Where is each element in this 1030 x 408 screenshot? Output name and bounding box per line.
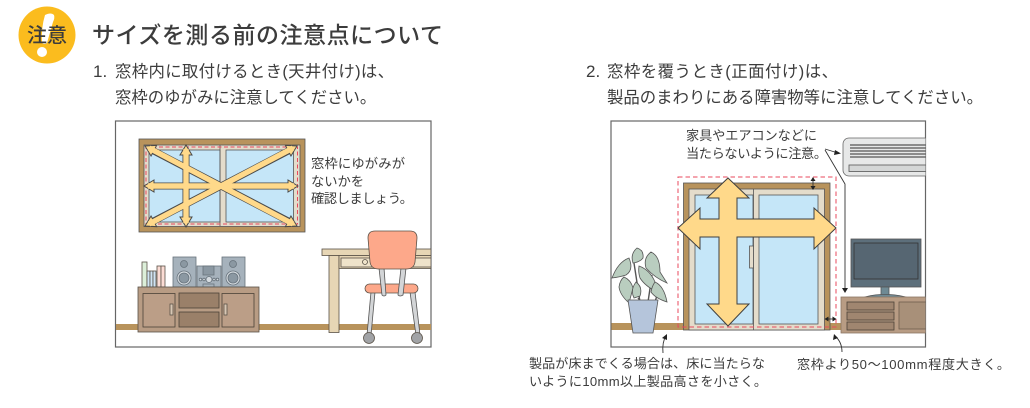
heading: case 1 [93,62,394,107]
room furniture [116,231,431,344]
note: floor clearance [529,356,767,389]
window with distortion arrows [139,139,305,232]
panel: inside mount [116,121,431,347]
icon: caution badge: 注意 [27,24,67,47]
heading: case 1: 1. [93,62,107,81]
title: サイズを測る前の注意点について [92,22,443,48]
text: check the frame: 確認しましょう。 [311,191,413,206]
note: floor clearance: いように10mm以上製品高さを小さく。 [529,373,767,389]
text: check the frame [311,156,413,206]
floor and furniture [611,138,933,333]
text: furniture warning: 家具やエアコンなどに [686,128,817,143]
icon: caution badge [18,6,76,64]
heading: case 1: 窓枠のゆがみに注意してください。 [115,89,376,107]
panel: face mount [611,121,933,353]
heading: case 2: 窓枠を覆うとき(正面付け)は、 [607,63,838,81]
text: furniture warning: 当たらないように注意。 [686,146,827,161]
heading: case 2: 2. [586,62,600,81]
heading: case 1: 窓枠内に取付けるとき(天井付け)は、 [115,63,394,81]
sliding window [678,177,836,330]
note: floor clearance: 製品が床までくる場合は、床に当たらな [529,356,765,371]
arrow: cross-shaped expansion arrows [678,178,836,326]
text: check the frame: 窓枠にゆがみが [311,156,405,171]
text: check the frame: ないかを [311,174,364,189]
heading: case 2: 製品のまわりにある障害物等に注意してください。 [607,89,983,107]
note: oversize: 窓枠より50〜100mm程度大きく。 [797,357,1010,372]
arrows: leaders and clearances [662,149,848,353]
text: furniture warning [686,128,827,161]
heading: case 2 [586,62,983,107]
